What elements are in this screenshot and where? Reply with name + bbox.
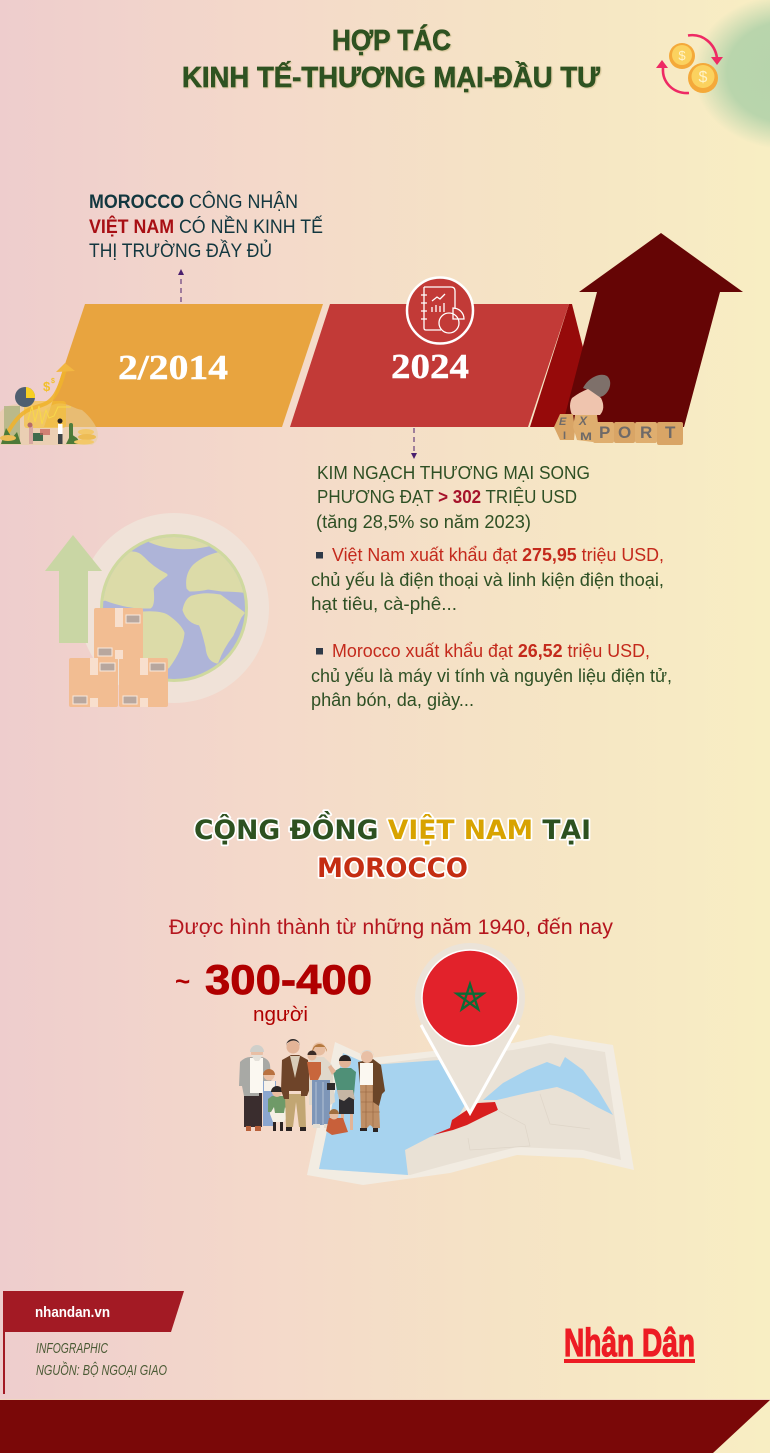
icon: globe with boxes and arrow <box>45 513 269 707</box>
banner: 2/2014: 2/2014 <box>118 348 228 387</box>
stat: 300-400 people: người <box>253 1004 308 1026</box>
text: Vietnam exports <box>311 544 664 614</box>
icon: coins exchange: $ <box>699 69 708 86</box>
arrow: down dashed <box>411 428 417 459</box>
text: source: NGUỒN: BỘ NGOẠI GIAO <box>36 1361 167 1379</box>
text: trade turnover: PHƯƠNG ĐẠT > 302 TRIỆU USD <box>317 487 577 507</box>
text: Morocco exports: phân bón, da, giày... <box>311 689 474 710</box>
icon: hand with export import cubes <box>554 375 683 445</box>
text: source <box>36 1341 167 1379</box>
text: Vietnam exports: chủ yếu là điện thoại và linh kiện điện thoại, <box>311 569 664 590</box>
text: Morocco exports: Morocco xuất khẩu đạt 26,52 triệu USD, <box>332 640 650 661</box>
person: mother holding child <box>307 1042 335 1128</box>
text: Morocco recognition: VIỆT NAM CÓ NỀN KINH TẾ <box>89 216 323 238</box>
stat: 300-400 people <box>175 956 372 1026</box>
text: Vietnam exports: Việt Nam xuất khẩu đạt 275,95 triệu USD, <box>332 544 664 565</box>
text: Morocco recognition <box>89 191 323 262</box>
text: Morocco recognition: THỊ TRƯỜNG ĐẦY ĐỦ <box>89 240 272 262</box>
big arrow <box>530 233 743 427</box>
arrow: up dashed <box>178 269 184 302</box>
title: KINH TẾ-THƯƠNG MẠI-ĐẦU TƯ <box>182 60 601 94</box>
person: grandfather <box>239 1045 272 1131</box>
text: Vietnam exports: hạt tiêu, cà-phê... <box>311 593 457 614</box>
icon: family group <box>239 1039 385 1135</box>
title <box>182 23 601 94</box>
map <box>307 1035 634 1185</box>
icon: growth illustration <box>0 363 98 445</box>
text: Morocco exports: chủ yếu là máy vi tính và nguyên liệu điện tử, <box>311 665 672 686</box>
banner: 2/2014 <box>44 304 323 427</box>
icon: hand with export import cubes: P <box>599 423 610 442</box>
icon: coins exchange: $ <box>678 48 686 63</box>
flag: nhandan.vn: nhandan.vn <box>35 1305 110 1321</box>
icon: growth illustration: $ <box>43 379 51 394</box>
person: father <box>281 1039 310 1131</box>
heading: community <box>194 810 591 884</box>
stat: 300-400 people: 300-400 <box>205 956 372 1003</box>
person: small girl <box>268 1086 291 1131</box>
text: trade turnover: (tăng 28,5% so năm 2023) <box>316 511 531 532</box>
flag: nhandan.vn <box>3 1291 184 1394</box>
icon: hand with export import cubes: E <box>559 416 567 428</box>
text: source: INFOGRAPHIC <box>36 1341 108 1357</box>
icon: coins exchange <box>656 35 723 93</box>
heading: community: MOROCCO <box>317 853 468 884</box>
icon: report badge <box>407 278 473 344</box>
icon: hand with export import cubes: I <box>563 430 566 442</box>
text: Morocco recognition: MOROCCO CÔNG NHẬN <box>89 191 298 213</box>
icon: hand with export import cubes: M <box>580 431 592 443</box>
text: formed since 1940: Được hình thành từ những năm 1940, đến nay <box>169 915 613 939</box>
footer bar <box>0 1399 770 1453</box>
icon: hand with export import cubes: O <box>618 423 631 442</box>
person: boy <box>328 1055 356 1130</box>
icon: growth illustration: $ <box>51 378 55 385</box>
person: grandmother <box>358 1050 385 1132</box>
text: trade turnover <box>316 463 590 532</box>
heading: community: CỘNG ĐỒNG VIỆT NAM TẠI <box>194 810 591 846</box>
icon: hand with export import cubes: X <box>578 414 588 428</box>
logo: Nhân Dân: Nhân Dân <box>564 1322 695 1365</box>
icon: hand with export import cubes: T <box>665 423 676 442</box>
text: Morocco exports <box>311 640 672 710</box>
title: HỢP TÁC <box>332 23 451 57</box>
person: baby crawling <box>326 1109 348 1135</box>
stat: 300-400 people: ~ <box>175 966 190 996</box>
person: girl in blue overalls <box>263 1069 276 1126</box>
icon: hand with export import cubes: R <box>640 423 652 442</box>
icon: location pin with Moroccan flag <box>415 943 525 1113</box>
text: trade turnover: KIM NGẠCH THƯƠNG MẠI SONG <box>317 463 590 483</box>
banner: 2024 <box>290 304 569 427</box>
banner: 2024: 2024 <box>391 347 469 386</box>
